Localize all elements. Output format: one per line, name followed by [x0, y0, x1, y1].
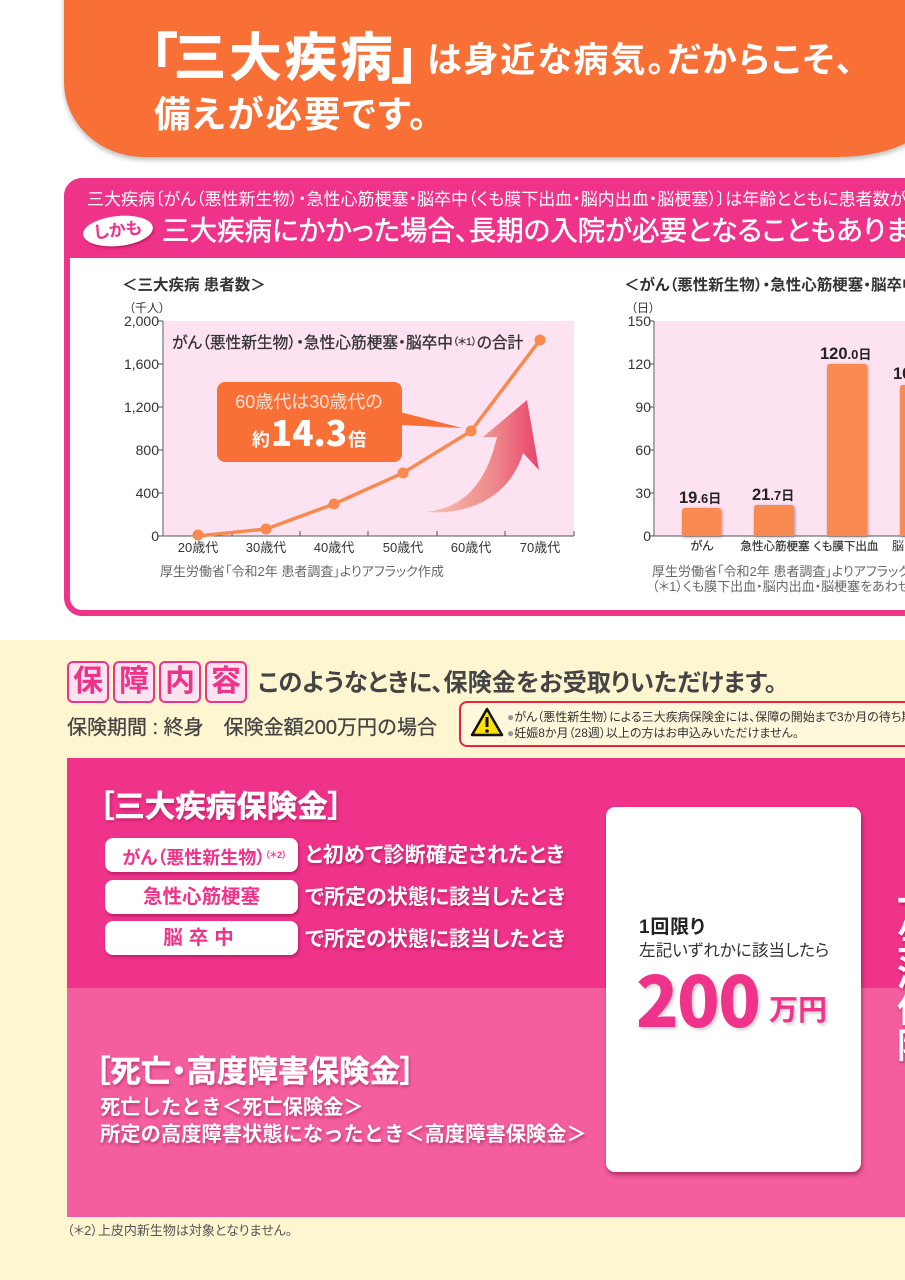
- title: three major diseases: 三大疾病: [174, 30, 396, 88]
- card text: once only: 1回限り: [639, 917, 706, 938]
- bar chart: hospital days: 21.7日: [752, 486, 794, 504]
- line chart: patient count: （＊1）: [453, 336, 477, 348]
- line chart: patient count: がん（悪性新生物）・急性心筋梗塞・脳卒中: [172, 335, 453, 352]
- condition text: stroke: で所定の状態に該当したとき: [305, 928, 565, 951]
- line chart: patient count: 1,600: [124, 356, 159, 372]
- footnote: （＊2）上皮内新生物は対象となりません。: [67, 1223, 292, 1238]
- line chart: patient count: 20歳代: [178, 540, 218, 555]
- panel: three major disease benefit: [67, 758, 905, 988]
- line chart: patient count: 2,000: [124, 313, 159, 329]
- condition text: cancer: と初めて診断確定されたとき: [305, 844, 564, 867]
- badges: coverage heading: 障: [119, 665, 149, 698]
- warning box: [459, 701, 905, 747]
- heading: three major disease benefit: ［三大疾病保険金］: [99, 790, 343, 824]
- bar chart: hospital days: 19.6日: [679, 489, 721, 507]
- title: rest of line one: は身近な病気。だからこそ、: [427, 41, 855, 80]
- pill: heart attack: 急性心筋梗塞: [143, 886, 260, 908]
- line chart: patient count: 60歳代: [451, 540, 491, 555]
- line chart: patient count: 1,200: [124, 399, 159, 415]
- badges: coverage heading: [67, 661, 247, 703]
- section background: coverage: [0, 640, 905, 1280]
- line chart: patient count: （千人）: [129, 301, 165, 315]
- line chart: patient count: 0: [151, 528, 159, 544]
- bar chart: hospital days: 120: [628, 356, 651, 372]
- panel header band: [64, 178, 905, 258]
- line chart: patient count: 60歳代は30歳代の: [235, 392, 383, 412]
- card text: amount: 200: [636, 947, 759, 1048]
- card: benefit amount: [606, 807, 861, 1172]
- bar chart: hospital days: 150: [628, 313, 651, 329]
- warning text: ●妊娠8か月（28週）以上の方はお申込みいただけません。: [507, 726, 799, 740]
- title: opening bracket: 「: [124, 30, 178, 90]
- condition text: heart attack: で所定の状態に該当したとき: [305, 886, 565, 909]
- line chart: patient count: 40歳代: [314, 540, 354, 555]
- text: insurance term and amount: 保険期間 : 終身 保険金額200万円の場合: [67, 717, 437, 739]
- title: closing bracket: 」: [391, 30, 445, 90]
- bar chart: hospital days: [628, 301, 905, 594]
- vertical text: lifetime coverage: [897, 883, 905, 1066]
- bar chart: hospital days: 120.0日: [820, 345, 871, 363]
- title: line two: 備えが必要です。: [154, 94, 429, 135]
- pill: heart attack: [105, 880, 298, 914]
- bar chart: hospital days: 60: [635, 442, 651, 458]
- text: death benefit conditions: [100, 1096, 587, 1147]
- line chart: patient count: 70歳代: [520, 540, 560, 555]
- line chart: patient count: の合計: [477, 334, 524, 352]
- card text: condition: 左記いずれかに該当したら: [639, 941, 829, 960]
- bar chart: hospital days: がん: [690, 538, 714, 553]
- pill: stroke: [105, 921, 298, 955]
- badge: shikamo: [82, 212, 154, 250]
- icon: warning triangle: [470, 708, 504, 736]
- badges: coverage heading: 容: [211, 665, 241, 698]
- badges: coverage heading: 保: [73, 665, 103, 698]
- title: [124, 30, 855, 135]
- line chart: patient count: [124, 301, 574, 579]
- panel: patient statistics: [64, 178, 905, 616]
- text: death benefit conditions: 所定の高度障害状態になったとき＜高度障害保険金＞: [100, 1124, 587, 1146]
- bar chart: hospital days: 90: [635, 399, 651, 415]
- heading: coverage: このようなときに、保険金をお受取りいただけます。: [258, 670, 777, 697]
- line chart: patient count: 厚生労働省「令和2年 患者調査」よりアフラック作成: [160, 564, 444, 579]
- pill: stroke: 脳卒中: [163, 927, 240, 949]
- bar chart: hospital days: 急性心筋梗塞: [740, 539, 810, 553]
- card text: unit: 万円: [769, 995, 827, 1027]
- line chart: patient count: 50歳代: [383, 540, 423, 555]
- orange header banner: [64, 0, 905, 157]
- badges: coverage heading: 内: [165, 665, 195, 698]
- line chart: patient count: 800: [136, 442, 159, 458]
- pill: cancer: がん（悪性新生物）（＊2）: [122, 848, 287, 868]
- heading: death and disability benefit: ［死亡・高度障害保険金］: [95, 1055, 415, 1089]
- bar chart: hospital days: 30: [635, 485, 651, 501]
- text: death benefit conditions: 死亡したとき＜死亡保険金＞: [100, 1097, 364, 1119]
- warning text: [507, 710, 905, 740]
- line chart: patient count: 約14.3倍: [252, 406, 366, 457]
- panel: death and disability benefit: [67, 988, 905, 1217]
- line chart: patient count: 30歳代: [246, 540, 286, 555]
- bar chart: hospital days: くも膜下出血: [814, 539, 879, 553]
- badge: shikamo: しかも: [93, 219, 143, 242]
- chart heading: patient count: ＜三大疾病 患者数＞: [122, 277, 266, 294]
- bar chart: hospital days: （日）: [631, 301, 655, 315]
- bar chart: hospital days: 0: [643, 528, 651, 544]
- pill: cancer: [105, 838, 298, 872]
- line chart: patient count: 400: [136, 485, 159, 501]
